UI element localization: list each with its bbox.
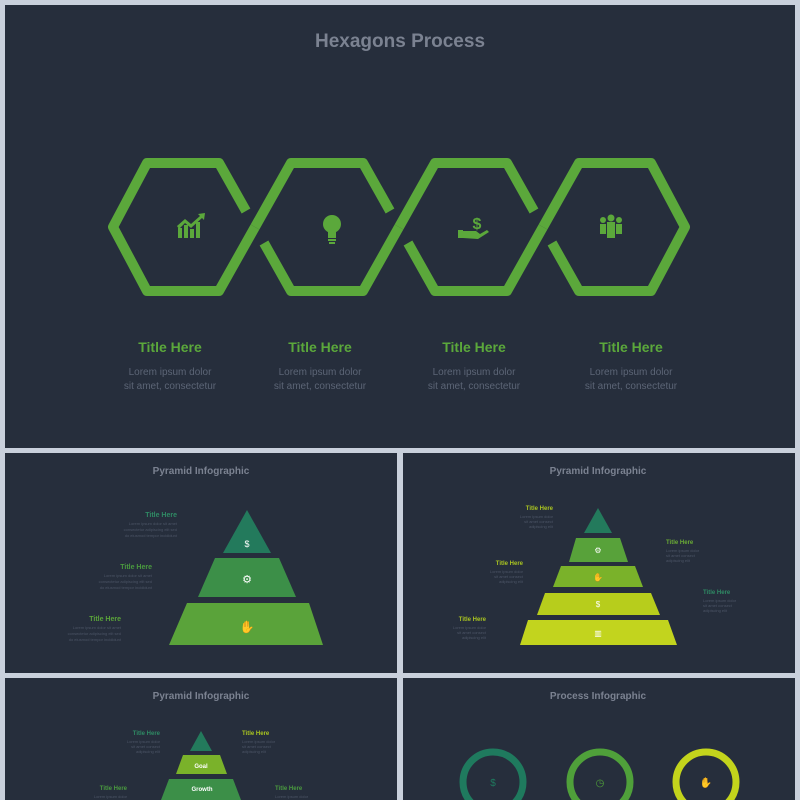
labels: Title Here bbox=[526, 506, 554, 512]
labels: sit amet consect bbox=[494, 574, 524, 579]
rings bbox=[463, 752, 736, 800]
pyramid bbox=[520, 508, 677, 645]
labels: do eiusmod tempor incididunt bbox=[125, 533, 178, 538]
panel: pyramid 5 tiers bbox=[403, 453, 795, 673]
pyramid: ✋ bbox=[240, 620, 254, 634]
labels: Lorem ipsum dolor sit amet bbox=[104, 573, 153, 578]
heading: Pyramid Infographic bbox=[153, 691, 250, 702]
labels: adipiscing elit bbox=[703, 608, 728, 613]
labels: adipiscing elit bbox=[136, 749, 161, 754]
labels: Lorem ipsum dolor bbox=[275, 794, 309, 799]
icon: lightbulb bbox=[323, 215, 341, 244]
text block 2 bbox=[274, 339, 367, 392]
text block 3: Lorem ipsum dolor bbox=[433, 367, 516, 378]
labels: Lorem ipsum dolor bbox=[127, 739, 161, 744]
labels: Title Here bbox=[459, 617, 487, 623]
labels: Lorem ipsum dolor bbox=[242, 739, 276, 744]
pyramid: $ bbox=[244, 539, 250, 549]
pyramid: ⚙ bbox=[242, 574, 252, 586]
labels: adipiscing elit bbox=[462, 635, 487, 640]
title: Hexagons Process bbox=[315, 31, 485, 52]
heading: Process Infographic bbox=[550, 691, 647, 702]
labels: sit amet consect bbox=[666, 553, 696, 558]
labels: Lorem ipsum dolor bbox=[490, 569, 524, 574]
labels: Lorem ipsum dolor bbox=[453, 625, 487, 630]
text block 3: sit amet, consectetur bbox=[428, 381, 521, 392]
labels: Title Here bbox=[89, 616, 121, 623]
labels: Title Here bbox=[100, 786, 128, 792]
labels: sit amet consect bbox=[524, 519, 554, 524]
hexagon chain bbox=[113, 163, 685, 291]
text block 1 bbox=[124, 339, 217, 392]
labels: sit amet consect bbox=[242, 744, 272, 749]
text block 3 bbox=[428, 339, 521, 392]
labels: Title Here bbox=[145, 512, 177, 519]
labels: adipiscing elit bbox=[242, 749, 267, 754]
labels: do eiusmod tempor incididunt bbox=[69, 637, 122, 642]
labels: Title Here bbox=[120, 564, 152, 571]
text block 1: Lorem ipsum dolor bbox=[129, 367, 212, 378]
panel: process infographic: $ bbox=[490, 778, 496, 789]
text block 4 bbox=[585, 339, 678, 392]
panel: process infographic: ✋ bbox=[700, 776, 712, 789]
labels bbox=[68, 512, 178, 642]
panel: process infographic: ◷ bbox=[596, 778, 605, 789]
text block 4: sit amet, consectetur bbox=[585, 381, 678, 392]
labels: Title Here bbox=[133, 731, 161, 737]
panel: pyramid 3 tiers bbox=[5, 453, 397, 673]
text block 3: Title Here bbox=[442, 339, 506, 355]
labels: adipiscing elit bbox=[529, 524, 554, 529]
labels: Title Here bbox=[496, 561, 524, 567]
text block 4: Title Here bbox=[599, 339, 663, 355]
text block 4: Lorem ipsum dolor bbox=[590, 367, 673, 378]
labels: sit amet consect bbox=[131, 744, 161, 749]
labels: Lorem ipsum dolor bbox=[94, 794, 128, 799]
labels: adipiscing elit bbox=[499, 579, 524, 584]
labels: consectetur adipiscing elit sed bbox=[124, 527, 177, 532]
labels bbox=[94, 731, 309, 799]
labels: Title Here bbox=[242, 731, 270, 737]
labels: sit amet consect bbox=[703, 603, 733, 608]
panel: pyramid goal growth bbox=[5, 678, 397, 800]
pyramid: ✋ bbox=[593, 572, 603, 582]
text block 2: Lorem ipsum dolor bbox=[279, 367, 362, 378]
labels: consectetur adipiscing elit sed bbox=[68, 631, 121, 636]
labels: Lorem ipsum dolor bbox=[703, 598, 737, 603]
pyramid: Goal bbox=[194, 764, 208, 770]
labels: Title Here bbox=[666, 540, 694, 546]
labels: adipiscing elit bbox=[666, 558, 691, 563]
text block 2: sit amet, consectetur bbox=[274, 381, 367, 392]
pyramid: ▥ bbox=[594, 629, 602, 638]
labels: sit amet consect bbox=[457, 630, 487, 635]
labels bbox=[453, 506, 737, 640]
icon: growth chart bbox=[177, 213, 205, 238]
heading: Pyramid Infographic bbox=[153, 466, 250, 477]
pyramid: ⚙ bbox=[594, 546, 602, 555]
labels: Lorem ipsum dolor sit amet bbox=[73, 625, 122, 630]
text block 1: sit amet, consectetur bbox=[124, 381, 217, 392]
labels: consectetur adipiscing elit sed bbox=[99, 579, 152, 584]
labels: Title Here bbox=[275, 786, 303, 792]
panel: process infographic bbox=[403, 678, 795, 800]
labels: Lorem ipsum dolor sit amet bbox=[129, 521, 178, 526]
text block 1: Title Here bbox=[138, 339, 202, 355]
panel: hexagons process bbox=[5, 5, 795, 448]
pyramid bbox=[169, 510, 323, 645]
labels: do eiusmod tempor incididunt bbox=[100, 585, 153, 590]
labels: Title Here bbox=[703, 590, 731, 596]
heading: Pyramid Infographic bbox=[550, 466, 647, 477]
labels: Lorem ipsum dolor bbox=[520, 514, 554, 519]
icon: money hand: $ bbox=[473, 216, 482, 233]
pyramid bbox=[161, 731, 241, 800]
icon: team bbox=[600, 214, 622, 238]
pyramid: Growth bbox=[192, 787, 213, 793]
text block 2: Title Here bbox=[288, 339, 352, 355]
labels: Lorem ipsum dolor bbox=[666, 548, 700, 553]
pyramid: $ bbox=[596, 600, 601, 609]
icon: money hand bbox=[458, 216, 489, 239]
